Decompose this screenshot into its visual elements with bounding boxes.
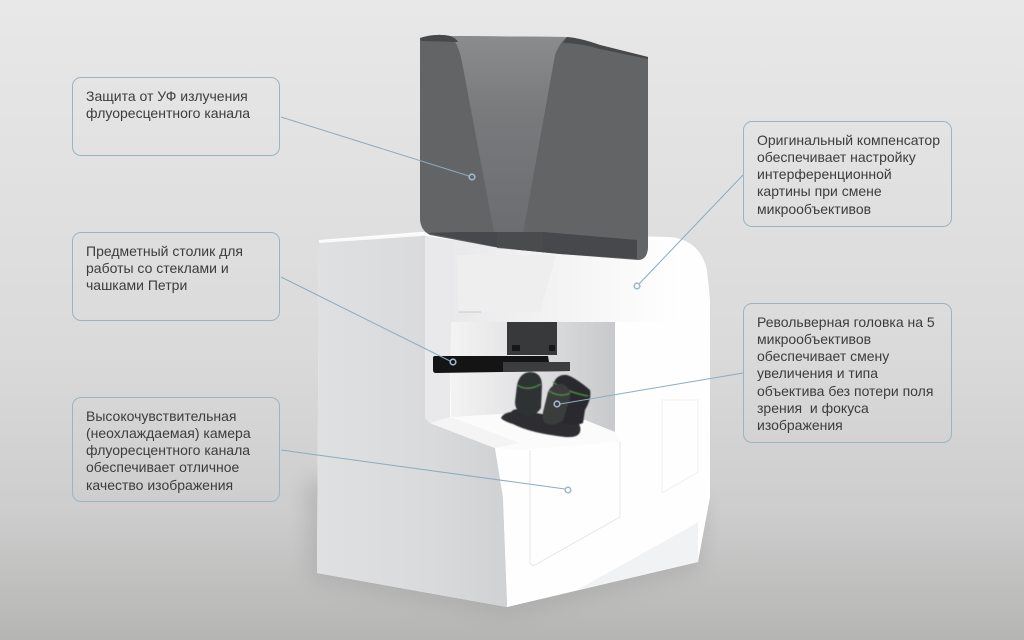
floor shadow <box>305 480 705 616</box>
callout: compensator: микрообъективов <box>757 201 871 217</box>
cavity <box>451 322 615 432</box>
upper front wall <box>450 240 680 322</box>
callout: revolver: микрообъективов <box>757 331 871 347</box>
callout: UV protection: Защита от УФ излучения <box>86 88 248 104</box>
inner chamfer beside cavity <box>425 236 452 423</box>
callout: UV protection: флуоресцентного канала <box>86 105 250 121</box>
callout: revolver <box>743 303 952 443</box>
left side face <box>317 235 507 607</box>
callout: camera: (неохлаждаемая) камера <box>86 425 251 441</box>
callout: revolver: Револьверная головка на 5 <box>757 314 935 330</box>
revolver with objectives <box>501 372 590 437</box>
callout: camera <box>72 397 280 502</box>
front panel outlines <box>530 442 620 566</box>
callout: compensator <box>743 121 952 227</box>
callout: revolver: изображения <box>757 417 843 433</box>
callout: stage: работы со стеклами и <box>86 260 229 276</box>
callout: camera: Высокочувствительная <box>86 408 236 424</box>
callout: camera: качество изображения <box>86 477 233 493</box>
device body <box>317 232 710 607</box>
callout: stage: Предметный столик для <box>86 242 243 258</box>
callout: stage <box>72 232 280 321</box>
stage, objective holder <box>433 322 570 373</box>
callout: revolver: обеспечивает смену <box>757 348 889 364</box>
callout: camera: обеспечивает отличное <box>86 459 239 475</box>
callout: revolver: объектива без потери поля <box>757 383 933 399</box>
lower right facet <box>577 522 698 590</box>
callout: compensator: Оригинальный компенсатор <box>757 132 940 148</box>
callout: revolver: зрения и фокуса <box>757 400 869 416</box>
callout: camera: флуоресцентного канала <box>86 442 250 458</box>
callout: compensator: картины при смене <box>757 183 882 199</box>
callout: UV protection <box>72 77 280 156</box>
callout: revolver: увеличения и типа <box>757 365 878 381</box>
callout: compensator: обеспечивает настройку <box>757 149 916 165</box>
callout markers <box>450 174 640 493</box>
callout leader lines <box>281 117 743 489</box>
callout: compensator: интерференционной <box>757 166 892 182</box>
dark UV cover <box>420 35 648 260</box>
callout: stage: чашками Петри <box>86 277 187 293</box>
